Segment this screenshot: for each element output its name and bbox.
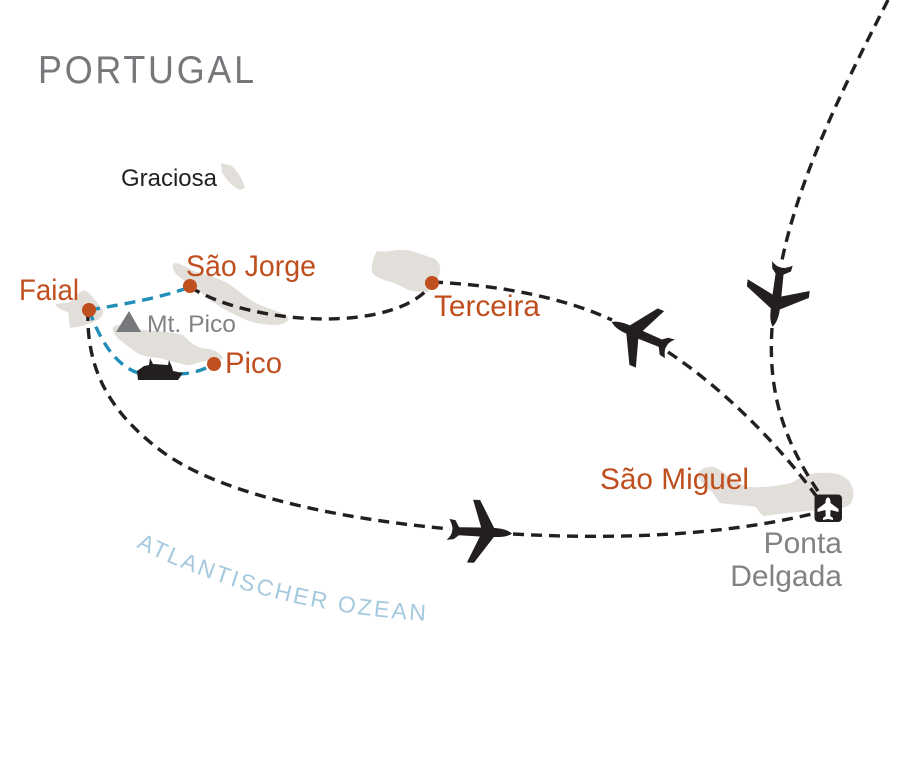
route: plane to Ponta Delgada — [668, 352, 817, 497]
ferry route: Faial to São Jorge — [89, 287, 190, 310]
route: Terceira to plane — [432, 282, 612, 320]
ferry route: Faial to Pico — [89, 310, 138, 373]
icon: plane incoming — [742, 258, 813, 331]
island: Terceira — [372, 250, 440, 292]
island: Faial — [55, 290, 103, 328]
label: Pico: Pico — [225, 347, 282, 380]
island: São Miguel — [697, 467, 853, 516]
icon: plane west — [446, 499, 513, 564]
label: Mt. Pico: Mt. Pico — [147, 311, 236, 338]
label: Terceira: Terceira — [434, 290, 540, 323]
ferry route: ferry to Pico — [178, 364, 214, 374]
route: São Jorge to Terceira — [190, 284, 432, 319]
label: Atlantischer Ozean: ATLANTISCHER OZEAN — [136, 536, 424, 621]
icon: airport Ponta Delgada — [814, 494, 842, 522]
label: Ponta Delgada: Delgada — [730, 560, 842, 593]
route: incoming flight — [781, 0, 888, 265]
label: Graciosa: Graciosa — [121, 165, 218, 192]
label: São Jorge: São Jorge — [186, 250, 316, 283]
label: Ponta Delgada: Ponta — [764, 527, 842, 560]
label: Ponta Delgada — [730, 527, 842, 593]
island: Graciosa — [221, 163, 245, 190]
island: Pico — [113, 325, 223, 365]
stop: São Jorge — [183, 279, 197, 293]
icon: plane centre — [599, 294, 683, 377]
route: plane to Ponta Delgada from west — [513, 512, 820, 536]
route: flight to Ponta Delgada — [771, 328, 822, 497]
stop: Faial — [82, 303, 96, 317]
title: Portugal: PORTUGAL — [38, 48, 257, 91]
icon: ferry — [137, 358, 183, 380]
icon: Mt. Pico triangle — [116, 311, 141, 332]
label: Faial: Faial — [19, 274, 79, 307]
island: São Jorge — [173, 263, 288, 325]
stop: Pico — [207, 357, 221, 371]
label: São Miguel: São Miguel — [600, 463, 749, 496]
stop: Terceira — [425, 276, 439, 290]
route: Faial to plane — [88, 310, 450, 529]
